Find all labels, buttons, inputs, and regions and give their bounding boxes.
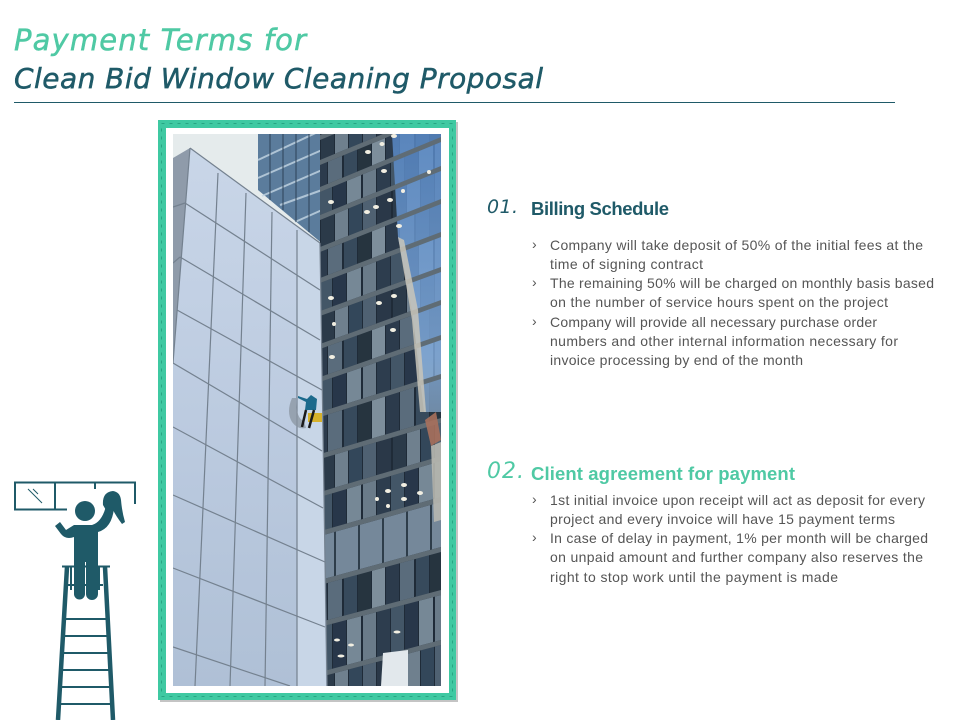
text block: billing bullets: Company will take deposit of 50% of the initial fees at the [550, 237, 923, 253]
text block: agreement bullets: on unpaid amount and further company also reserves the [550, 549, 923, 565]
front glass face [173, 148, 327, 686]
blue sky reflection [392, 134, 441, 412]
panel: photo frame [158, 85, 458, 720]
icon: person cleaning window on ladder [15, 482, 135, 720]
text block: billing bullets: time of signing contract [550, 256, 703, 272]
text block: agreement bullets: 1st initial invoice upon receipt will act as deposit for every [550, 492, 925, 508]
text block: agreement bullets [532, 491, 928, 585]
text block: billing bullets: › [532, 313, 537, 329]
floor bands [320, 85, 441, 677]
text block: agreement bullets: project and every invoice will have 15 payment terms [550, 511, 895, 527]
icon: person [55, 501, 114, 600]
text block: billing bullets: on the number of service hours spent on the project [550, 294, 888, 310]
lights [328, 134, 431, 658]
section 02: client agreement: Client agreement for payment [531, 463, 795, 484]
title: Payment Terms for [14, 23, 308, 57]
text block: billing bullets: › [532, 274, 537, 290]
photo: window cleaner on glass building [173, 134, 441, 686]
icon: ladder [58, 566, 113, 720]
right tower windows [320, 134, 441, 686]
section 01: billing schedule [487, 196, 934, 368]
text block: billing bullets: › [532, 236, 537, 252]
icon: window [15, 482, 135, 510]
window cleaner [289, 395, 322, 428]
text block: agreement bullets: In case of delay in payment, 1% per month will be charged [550, 530, 928, 546]
text block: billing bullets: invoice processing by end of the month [550, 352, 803, 368]
section 02: client agreement: 02. [487, 459, 524, 484]
section 01: billing schedule: Billing Schedule [531, 198, 669, 219]
text block: billing bullets [532, 236, 934, 368]
text block: agreement bullets: › [532, 491, 537, 507]
title: Clean Bid Window Cleaning Proposal [14, 62, 543, 95]
text block: billing bullets: Company will provide all necessary purchase order [550, 314, 877, 330]
text block: agreement bullets: › [532, 529, 537, 545]
icon: cloth [103, 491, 125, 524]
section 02: client agreement [487, 459, 928, 585]
reflection [398, 237, 426, 412]
section 01: billing schedule: 01. [487, 196, 518, 218]
title [14, 23, 543, 95]
text block: agreement bullets: right to stop work until the payment is made [550, 569, 838, 585]
text block: billing bullets: The remaining 50% will be charged on monthly basis based [550, 275, 934, 291]
text block: billing bullets: numbers and other internal information necessary for [550, 333, 898, 349]
background tower [258, 134, 320, 242]
